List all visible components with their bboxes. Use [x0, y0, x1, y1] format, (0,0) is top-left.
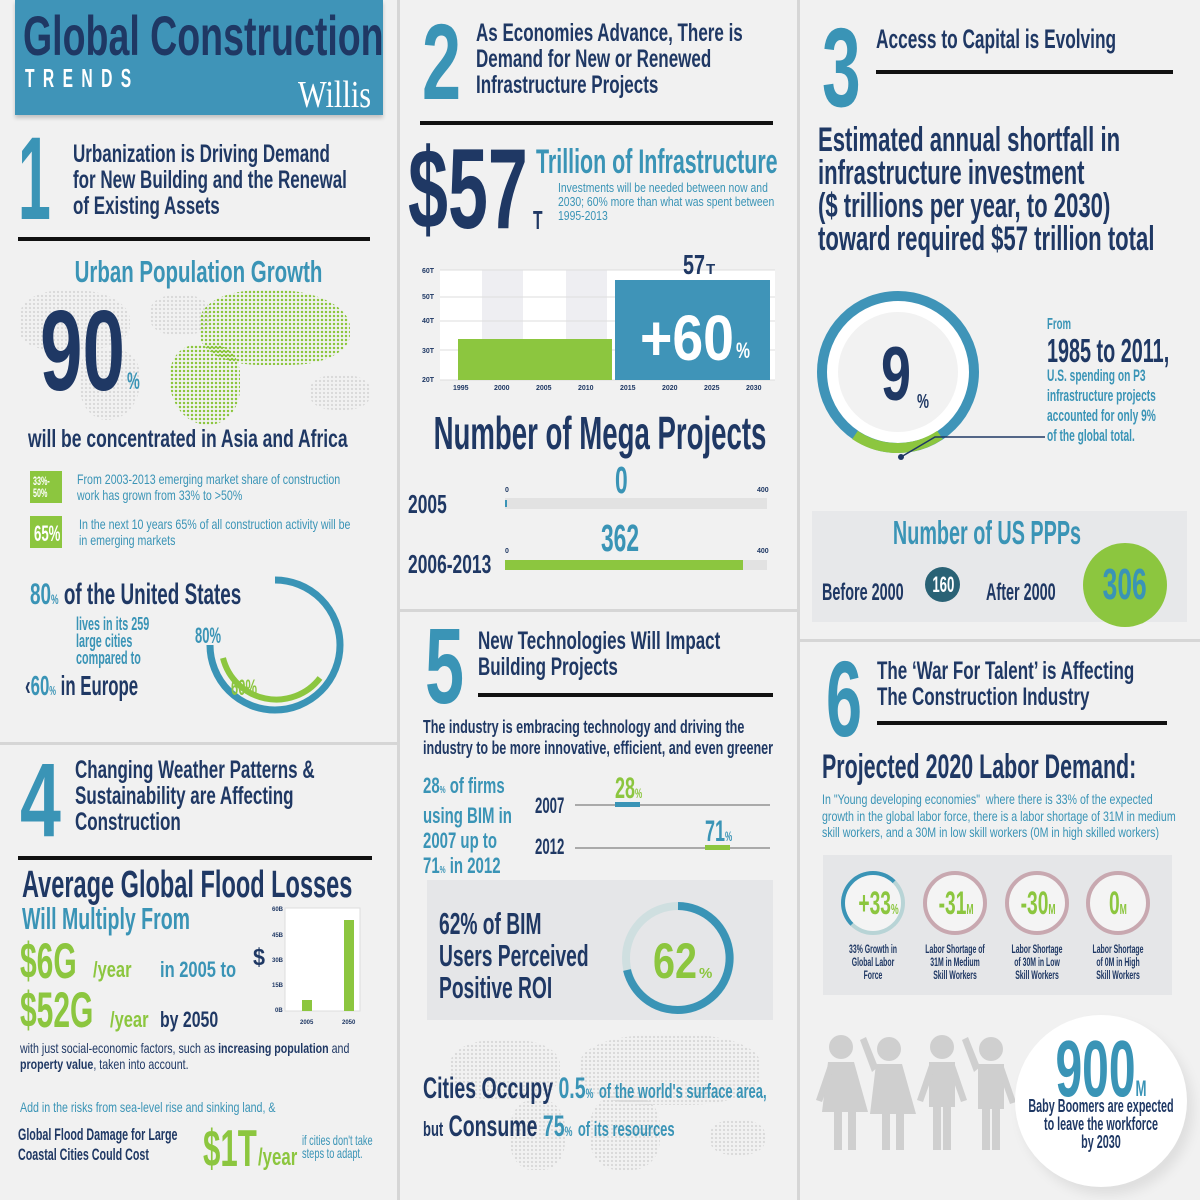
text: % [127, 368, 140, 395]
labor circles box: Skill Workers [1096, 970, 1140, 982]
header: title box [15, 0, 383, 115]
mega projects bars: 0 [505, 487, 509, 494]
9% ring [817, 291, 1045, 460]
900M callout [1015, 1015, 1187, 1187]
section 1 heading [18, 113, 347, 245]
urban population heading: Urban Population Growth [75, 254, 322, 289]
section 6 heading [826, 638, 1134, 759]
section 6 heading: 6 [826, 638, 862, 759]
shortfall text [818, 121, 1154, 258]
mega projects bars: 2005 [408, 489, 447, 519]
labor circles box: Labor Shortage [1092, 944, 1143, 956]
flood note: property value, taken into account. [20, 1056, 189, 1072]
section 6 heading: The ‘War For Talent’ is Affecting [877, 657, 1134, 685]
BIM line chart: 2012 [535, 834, 564, 859]
infrastructure bar chart: 1995 [453, 385, 469, 392]
text: growth in the global labor force, there is a labor shortage of 31M in medium [822, 808, 1176, 824]
bullet 2: 65% [34, 521, 60, 546]
flood bar chart: 60B [272, 907, 284, 913]
icon: people silhouettes [816, 1035, 1015, 1150]
coastal cities callout: Global Flood Damage for Large [18, 1125, 177, 1144]
infrastructure bar chart: 2000 [494, 385, 510, 392]
labor circles box: Force [864, 970, 882, 982]
world map dotted 2 [451, 1036, 765, 1170]
infrastructure bar chart: 57 [683, 249, 705, 280]
section 1 heading: for New Building and the Renewal [73, 166, 347, 194]
mega projects bars: 362 [601, 518, 639, 560]
coastal cities callout [18, 1120, 373, 1178]
tech intro text: The industry is embracing technology and driving the [423, 717, 744, 737]
infrastructure bar chart: 2015 [620, 385, 636, 392]
bullet 1: 33%- [33, 474, 50, 488]
infrastructure bar chart: 30T [422, 348, 435, 355]
coastal cities callout: steps to adapt. [302, 1145, 363, 1161]
flood note: with just social-economic factors, such as increasing population and [20, 1040, 349, 1056]
ROI ring [622, 902, 734, 1014]
circle -31: -31M [939, 885, 974, 921]
ring chart 80/60 [195, 576, 344, 714]
shortfall text: ($ trillions per year, to 2030) [818, 187, 1110, 225]
caption: will be concentrated in Asia and Africa [28, 425, 348, 453]
US stat text: lives in its 259 [76, 614, 149, 634]
$57T stat: T [533, 205, 543, 235]
US stat text [25, 578, 241, 701]
text: in 2005 to [160, 957, 236, 982]
$57T stat: 1995-2013 [558, 208, 608, 223]
BIM line chart: 71% [705, 815, 732, 848]
P3 text: accounted for only 9% [1047, 406, 1156, 425]
infrastructure bar chart: 20T [422, 377, 435, 384]
section 3 heading: 3 [822, 5, 861, 130]
mega projects bars: 2006-2013 [408, 549, 491, 579]
BIM stat text: using BIM in [423, 803, 512, 828]
BIM stat text: 2007 up to [423, 828, 497, 853]
$57T stat: Investments will be needed between now and [558, 180, 768, 195]
infrastructure bar chart: 2005 [536, 385, 552, 392]
P3 text: infrastructure projects [1047, 386, 1156, 405]
coastal cities callout: Coastal Cities Could Cost [18, 1145, 149, 1164]
BIM stat text: 28% of firms [423, 773, 505, 798]
section 4 heading [20, 742, 315, 859]
US stat text: compared to [76, 648, 141, 668]
section 2 heading: As Economies Advance, There is [476, 19, 743, 47]
section 4 heading: Sustainability are Affecting [75, 782, 294, 810]
P3 text [1047, 316, 1169, 445]
labor circles box: Global Labor [852, 957, 894, 969]
9% ring: % [917, 391, 929, 413]
bullet 2 [30, 516, 350, 548]
section 4 heading: Changing Weather Patterns & [75, 756, 315, 784]
bullet 2: in emerging markets [79, 532, 175, 548]
section 2 heading: Demand for New or Renewed [476, 45, 711, 73]
section 4 heading: 4 [20, 742, 61, 859]
cities callout [423, 1072, 767, 1143]
P3 text: U.S. spending on P3 [1047, 366, 1146, 385]
$57T stat [408, 126, 778, 253]
mega projects bars: 0 [505, 548, 509, 555]
infrastructure bar chart: 60T [422, 268, 435, 275]
ROI box [427, 880, 773, 1020]
infrastructure bar chart: 40T [422, 318, 435, 325]
section 2 heading [422, 1, 743, 122]
labor circles box: of 0M in High [1096, 957, 1140, 969]
US stat text: large cities [76, 631, 132, 651]
infrastructure bar chart: T [706, 261, 715, 278]
flood note [20, 1040, 349, 1072]
900M callout: 900M [1055, 1024, 1147, 1113]
PPP box: 306 [1103, 560, 1147, 609]
ROI ring: 62 [653, 933, 697, 989]
circle +33 [841, 871, 905, 935]
section 5 heading: 5 [425, 605, 464, 726]
coastal cities callout: $1T [203, 1120, 257, 1178]
text: $6G [20, 933, 77, 989]
circle -30 [1005, 871, 1069, 935]
labor circles box: Labor Shortage [1012, 944, 1062, 956]
P3 text: of the global total. [1047, 426, 1135, 445]
infrastructure bar chart: 2020 [662, 385, 678, 392]
coastal cities callout: if cities don't take [302, 1132, 373, 1148]
circle -30: -30M [1021, 885, 1056, 921]
mega projects heading: Number of Mega Projects [434, 407, 766, 459]
PPP box [812, 511, 1187, 622]
section 5 heading: Building Projects [478, 653, 618, 681]
$57T stat: 2030; 60% more than what was spent between [558, 194, 774, 209]
logo: Willis: Willis [298, 74, 371, 116]
circle 0: 0M [1109, 885, 1127, 921]
subtitle: TRENDS [25, 63, 140, 93]
ROI box: 62% of BIM [439, 906, 542, 941]
text: In "Young developing economies" where there is 33% of the expected [822, 791, 1153, 807]
labor circles box: Skill Workers [1015, 970, 1059, 982]
flood bar chart: $ [253, 944, 266, 971]
labor circles box: 33% Growth in [849, 944, 897, 956]
circle -31 [923, 871, 987, 935]
BIM line chart: 2007 [535, 793, 564, 818]
$57T stat: $57 [408, 126, 528, 253]
text: $52G [20, 982, 93, 1038]
labor circles box: Labor Shortage of [925, 944, 985, 956]
infrastructure bar chart: +60 [640, 302, 734, 374]
bullet 1 [30, 471, 340, 503]
bullet 1: 50% [33, 486, 47, 500]
9% ring: 9 [881, 332, 911, 417]
tech intro text: industry to be more innovative, efficient, and even greener [423, 738, 773, 758]
flood bar chart: 0B [275, 1008, 283, 1014]
section 2 heading: 2 [422, 1, 461, 122]
flood bar chart: 2050 [342, 1020, 356, 1026]
$57T stat: Trillion of Infrastructure [536, 143, 778, 181]
BIM stat text [423, 773, 512, 878]
flood bar chart: 2005 [300, 1020, 314, 1026]
P3 text: From [1047, 316, 1071, 333]
text: Add in the risks from sea-level rise and sinking land, & [20, 1099, 275, 1115]
900M callout: to leave the workforce [1044, 1114, 1158, 1134]
text: Will Multiply From [22, 901, 190, 936]
mega projects bars: 0 [615, 460, 628, 502]
section 4 heading: Construction [75, 808, 181, 836]
infrastructure bar chart: 2025 [704, 385, 720, 392]
PPP box: 160 [932, 572, 954, 597]
shortfall text: Estimated annual shortfall in [818, 121, 1120, 159]
cities callout: Cities Occupy 0.5% of the world's surface area, [423, 1072, 767, 1105]
ROI box: Positive ROI [439, 970, 552, 1005]
bullet 2: In the next 10 years 65% of all construction activity will be [79, 516, 350, 532]
900M callout: by 2030 [1081, 1132, 1121, 1152]
PPP box: Before 2000 [822, 579, 904, 606]
section 3 heading: Access to Capital is Evolving [876, 24, 1116, 54]
section 1 heading: of Existing Assets [73, 192, 220, 220]
section 1 heading: 1 [18, 113, 51, 245]
BIM line chart: 28% [615, 772, 642, 805]
infrastructure bar chart: 2030 [746, 385, 762, 392]
US stat text: 80% of the United States [30, 578, 241, 611]
ROI ring: % [699, 965, 712, 982]
ring chart 80/60: 60% [231, 675, 257, 700]
900M callout: Baby Boomers are expected [1028, 1096, 1174, 1116]
shortfall text: infrastructure investment [818, 154, 1084, 192]
section 5 heading [425, 605, 720, 726]
labor circles box: Skill Workers [933, 970, 977, 982]
title: Global Construction [23, 4, 384, 67]
flood bar chart [253, 906, 360, 1026]
infrastructure bar chart [422, 249, 775, 392]
bullet 1: work has grown from 33% to >50% [77, 487, 242, 503]
section 6 heading: The Construction Industry [877, 683, 1090, 711]
mega projects bars: 400 [757, 487, 769, 494]
section 2 heading: Infrastructure Projects [476, 71, 658, 99]
infrastructure bar chart: % [736, 338, 750, 363]
flood bar chart: 45B [272, 933, 284, 939]
shortfall text: toward required $57 trillion total [818, 220, 1154, 258]
labor circles box [823, 855, 1172, 995]
flood losses text: Average Global Flood Losses [22, 864, 352, 906]
text: by 2050 [160, 1007, 218, 1032]
mega projects bars: 400 [757, 548, 769, 555]
flood bar chart: 30B [272, 958, 284, 964]
PPP box: Number of US PPPs [893, 514, 1081, 551]
world map dotted [21, 290, 369, 424]
text: /year [93, 957, 132, 982]
BIM stat text: 71% in 2012 [423, 853, 501, 878]
labor circles box: of 30M in Low [1014, 957, 1060, 969]
labor circles box: 31M in Medium [930, 957, 980, 969]
section 3 heading [822, 5, 1116, 130]
tech intro text [423, 717, 773, 758]
text: skill workers, and a 30M in low skill workers (0M in high skilled workers) [822, 824, 1159, 840]
text: /year [110, 1007, 149, 1032]
circle 0 [1086, 871, 1150, 935]
labor demand heading: Projected 2020 Labor Demand: [822, 748, 1136, 786]
circle +33: +33% [858, 885, 899, 921]
infrastructure bar chart: 2010 [578, 385, 594, 392]
US stat text: ‹60% in Europe [25, 670, 138, 701]
ring chart 80/60: 80% [195, 623, 221, 648]
ROI box: Users Perceived [439, 938, 589, 973]
PPP box: After 2000 [986, 579, 1056, 606]
coastal cities callout: /year [258, 1144, 297, 1171]
P3 text: 1985 to 2011, [1047, 332, 1169, 369]
bullet 1: From 2003-2013 emerging market share of construction [77, 471, 340, 487]
cities callout: but Consume 75% of its resources [423, 1110, 675, 1143]
flood bar chart: 15B [272, 983, 284, 989]
mega projects bars [408, 460, 769, 579]
BIM line chart [535, 772, 770, 859]
infrastructure bar chart: 50T [422, 294, 435, 301]
section 1 heading: Urbanization is Driving Demand [73, 140, 330, 168]
stat: 90%: 90 [40, 288, 125, 415]
section 5 heading: New Technologies Will Impact [478, 627, 720, 655]
